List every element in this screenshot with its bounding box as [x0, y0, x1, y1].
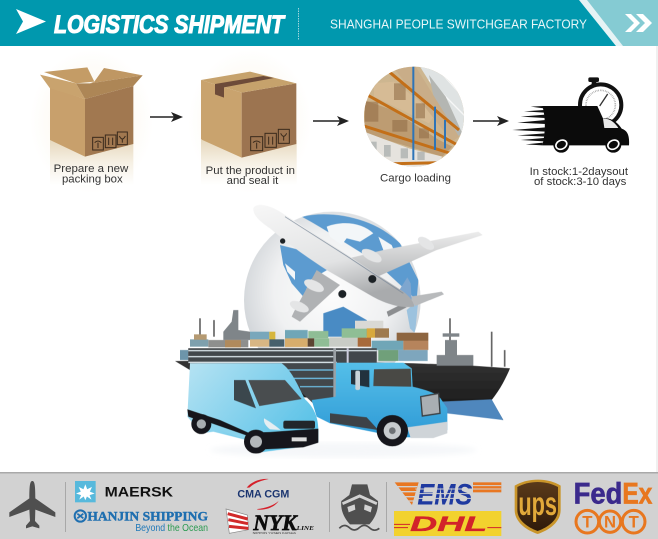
step 3: warehouse photo [362, 65, 466, 170]
logo: DHL [394, 511, 501, 536]
logo: NYK Line: NYK [252, 510, 298, 535]
logo: NYK Line [226, 509, 314, 535]
logo: TNT: T [629, 513, 639, 532]
logo: Hanjin Shipping [75, 509, 208, 534]
logo: CMA CGM: CMA CGM [237, 489, 289, 501]
logo: TNT: N [604, 513, 616, 532]
logo: TNT [576, 510, 645, 533]
globe [244, 212, 420, 363]
logo: EMS [395, 478, 501, 511]
caption [54, 163, 128, 185]
caption: In stock:1-2daysout [530, 166, 628, 178]
logo: Hanjin Shipping: Beyond the Ocean [135, 523, 208, 534]
caption: cargo loading: Cargo loading [380, 172, 451, 184]
logo: FedEx [574, 477, 653, 510]
trailer [188, 348, 377, 407]
white van [187, 363, 318, 454]
step 2: sealed box [188, 50, 312, 193]
caption: and seal it [227, 175, 278, 187]
footer logo strip [0, 472, 658, 539]
logo: CMA CGM [237, 479, 289, 510]
containers [180, 321, 428, 361]
step 4: delivery truck with stopwatch [512, 77, 629, 188]
caption: packing box [62, 173, 123, 185]
logo: DHL: DHL [410, 512, 487, 536]
plane [253, 205, 483, 322]
logo: UPS [515, 480, 561, 534]
icon: paper arrow [16, 9, 46, 34]
logo: FedEx: Fed [574, 477, 622, 510]
logo: Maersk [75, 481, 173, 502]
logo: EMS: EMS [417, 478, 472, 511]
factory name: SHANGHAI PEOPLE SWITCHGEAR FACTORY [330, 16, 587, 32]
icon: stopwatch [580, 77, 621, 126]
header banner [0, 0, 658, 46]
blue truck [312, 363, 447, 446]
icon: double chevron [625, 14, 652, 32]
caption: Put the product in [206, 165, 295, 177]
step 1: open box [30, 50, 153, 193]
caption [206, 165, 295, 187]
logo: FedEx: Ex [622, 477, 653, 510]
logo: NYK Line: NIPPON YUSEN KAISHA [253, 531, 296, 535]
caption: of stock:3-10 days [534, 176, 627, 188]
arrow 3 [473, 116, 509, 126]
icon: airplane [9, 481, 55, 528]
caption [530, 166, 628, 188]
title: LOGISTICS SHIPMENT [54, 11, 286, 39]
icon: ship [339, 484, 379, 530]
ship [175, 310, 510, 420]
logo: Hanjin Shipping: HANJIN SHIPPING [87, 509, 208, 523]
logo: Maersk: MAERSK [105, 485, 173, 500]
logo: NYK Line: LINE [295, 526, 314, 532]
arrow 1 [150, 112, 183, 122]
central illustration: plane, globe, ship, van and truck [175, 205, 510, 457]
arrow 2 [313, 116, 349, 126]
logo: UPS: ups [518, 486, 557, 523]
caption: Prepare a new [54, 163, 128, 175]
logo: TNT: T [582, 513, 592, 532]
